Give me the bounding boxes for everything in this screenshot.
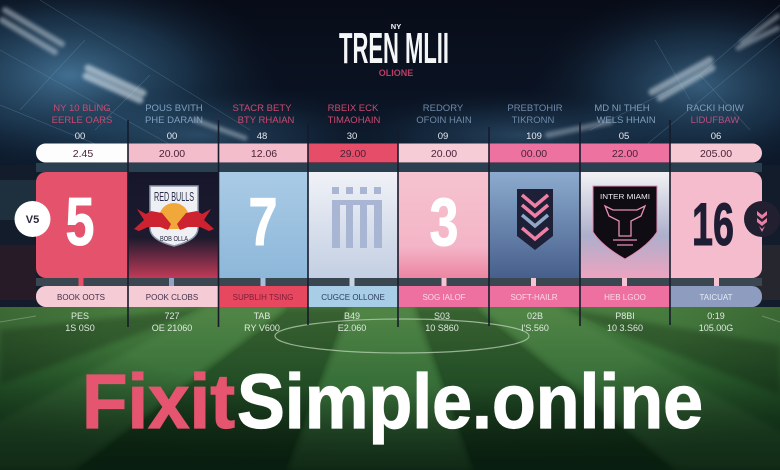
column headings: RBEIX ECK xyxy=(328,103,379,114)
small values row xyxy=(75,131,721,142)
column headings: EERLE OARS xyxy=(52,115,112,126)
category bar: BOOK OOTS xyxy=(57,293,105,302)
wordmark: FixitSimple.online: Fixit xyxy=(82,359,235,445)
column headings: MD NI THEH xyxy=(594,103,650,114)
column headings: PHE DARAIN xyxy=(145,115,203,126)
bottom stats: 02B xyxy=(527,311,543,321)
football pitch xyxy=(0,307,780,470)
column headings: RACKI HOIW xyxy=(686,103,744,114)
connector stems xyxy=(78,278,719,286)
value bar: 2.45 xyxy=(73,148,93,160)
value bar: 20.00 xyxy=(431,148,457,160)
column headings: LIDUFBAW xyxy=(691,115,739,126)
value bar: 205.00 xyxy=(700,148,732,160)
bottom stats: S03 xyxy=(434,311,450,321)
icon: red bulls crest: BOB OLLA xyxy=(160,234,188,243)
icon: inter miami crest: INTER MIAMI xyxy=(600,192,650,201)
category bar: TAICUAT xyxy=(699,293,733,302)
value bar: 12.06 xyxy=(251,148,277,160)
panel: 16 xyxy=(670,172,762,278)
bottom stats: PES xyxy=(71,311,89,321)
small values row: 05 xyxy=(619,131,629,142)
title: subtitle: OLIONE xyxy=(379,68,413,78)
category bar: SOG IALOF xyxy=(422,293,466,302)
panel: 5: 5 xyxy=(66,184,94,260)
panel: 7: 7 xyxy=(248,184,278,260)
category bar: SOFT-HAILR xyxy=(510,293,558,302)
bottom stats: I'S.560 xyxy=(521,323,549,333)
small values row: 30 xyxy=(347,131,357,142)
bottom stats: 105.00G xyxy=(699,323,733,333)
column headings: TIMAOHAIN xyxy=(328,115,381,126)
badge: right icon xyxy=(744,201,780,237)
bottom stats xyxy=(65,311,733,333)
bottom stats: 727 xyxy=(164,311,180,321)
value bar: 20.00 xyxy=(159,148,185,160)
column headings: POUS BVITH xyxy=(145,103,203,114)
bottom stats: 10 3.S60 xyxy=(607,323,643,333)
title: NY: NY xyxy=(391,22,401,31)
category bar: CUGCE OLLONE xyxy=(321,293,385,302)
icon: red bulls crest: RED BULLS xyxy=(154,189,194,204)
small values row: 48 xyxy=(257,131,267,142)
panel: emblem xyxy=(308,172,398,278)
small values row: 109 xyxy=(526,131,542,142)
badge: V5: V5 xyxy=(26,214,39,226)
panel: 5 xyxy=(36,172,128,278)
value bar: 29.00 xyxy=(340,148,366,160)
small values row: 09 xyxy=(438,131,448,142)
column headings: NY 10 BLING xyxy=(53,103,111,114)
panel: 7 xyxy=(218,172,308,278)
column headings: WELS HHAIN xyxy=(596,115,656,126)
category bar: HEB LGOO xyxy=(604,293,646,302)
panel: 16: 16 xyxy=(692,191,734,258)
value bar xyxy=(36,143,762,163)
bottom stats: RY V600 xyxy=(244,323,280,333)
value bar: 22.00 xyxy=(612,148,638,160)
category bar: POOK CLOBS xyxy=(146,293,198,302)
column headings xyxy=(52,103,744,126)
column headings: REDORY xyxy=(423,103,464,114)
column headings: BTY RHAIAN xyxy=(238,115,295,126)
column headings: PREBTOHIR xyxy=(507,103,563,114)
small values row: 00 xyxy=(75,131,85,142)
bottom stats: 1S 0S0 xyxy=(65,323,95,333)
column headings: TIKRONN xyxy=(512,115,555,126)
bottom stats: E2.060 xyxy=(338,323,366,333)
value bar: 00.00 xyxy=(521,148,547,160)
title: main: TREN MLII xyxy=(339,24,449,73)
panel: red bulls xyxy=(128,172,218,278)
panel: 3 xyxy=(398,172,489,278)
category bar xyxy=(36,286,762,307)
small values row: 06 xyxy=(711,131,721,142)
panel: chevron badge xyxy=(489,172,580,278)
icon: red bulls crest xyxy=(134,186,214,246)
bottom stats: OE 21060 xyxy=(152,323,192,333)
small values row: 00 xyxy=(167,131,177,142)
column dividers xyxy=(128,120,670,327)
icon: column emblem xyxy=(332,187,382,248)
stadium background xyxy=(0,0,780,320)
bottom stats: P8BI xyxy=(615,311,635,321)
bottom stats: 0:19 xyxy=(707,311,725,321)
column headings: OFOIN HAIN xyxy=(416,115,472,126)
bottom stats: 10 S860 xyxy=(425,323,459,333)
wordmark: FixitSimple.online: Simple.online xyxy=(237,359,703,445)
panel: inter miami xyxy=(580,172,670,278)
icon: chevron shield xyxy=(517,189,553,250)
column headings: STACR BETY xyxy=(233,103,292,114)
bottom stats: TAB xyxy=(254,311,270,321)
panel: 3: 3 xyxy=(430,184,458,260)
bottom stats: B49 xyxy=(344,311,360,321)
badge: V5 xyxy=(14,201,50,237)
title block xyxy=(339,22,449,78)
category bar: SUPBLIH TSING xyxy=(233,293,293,302)
